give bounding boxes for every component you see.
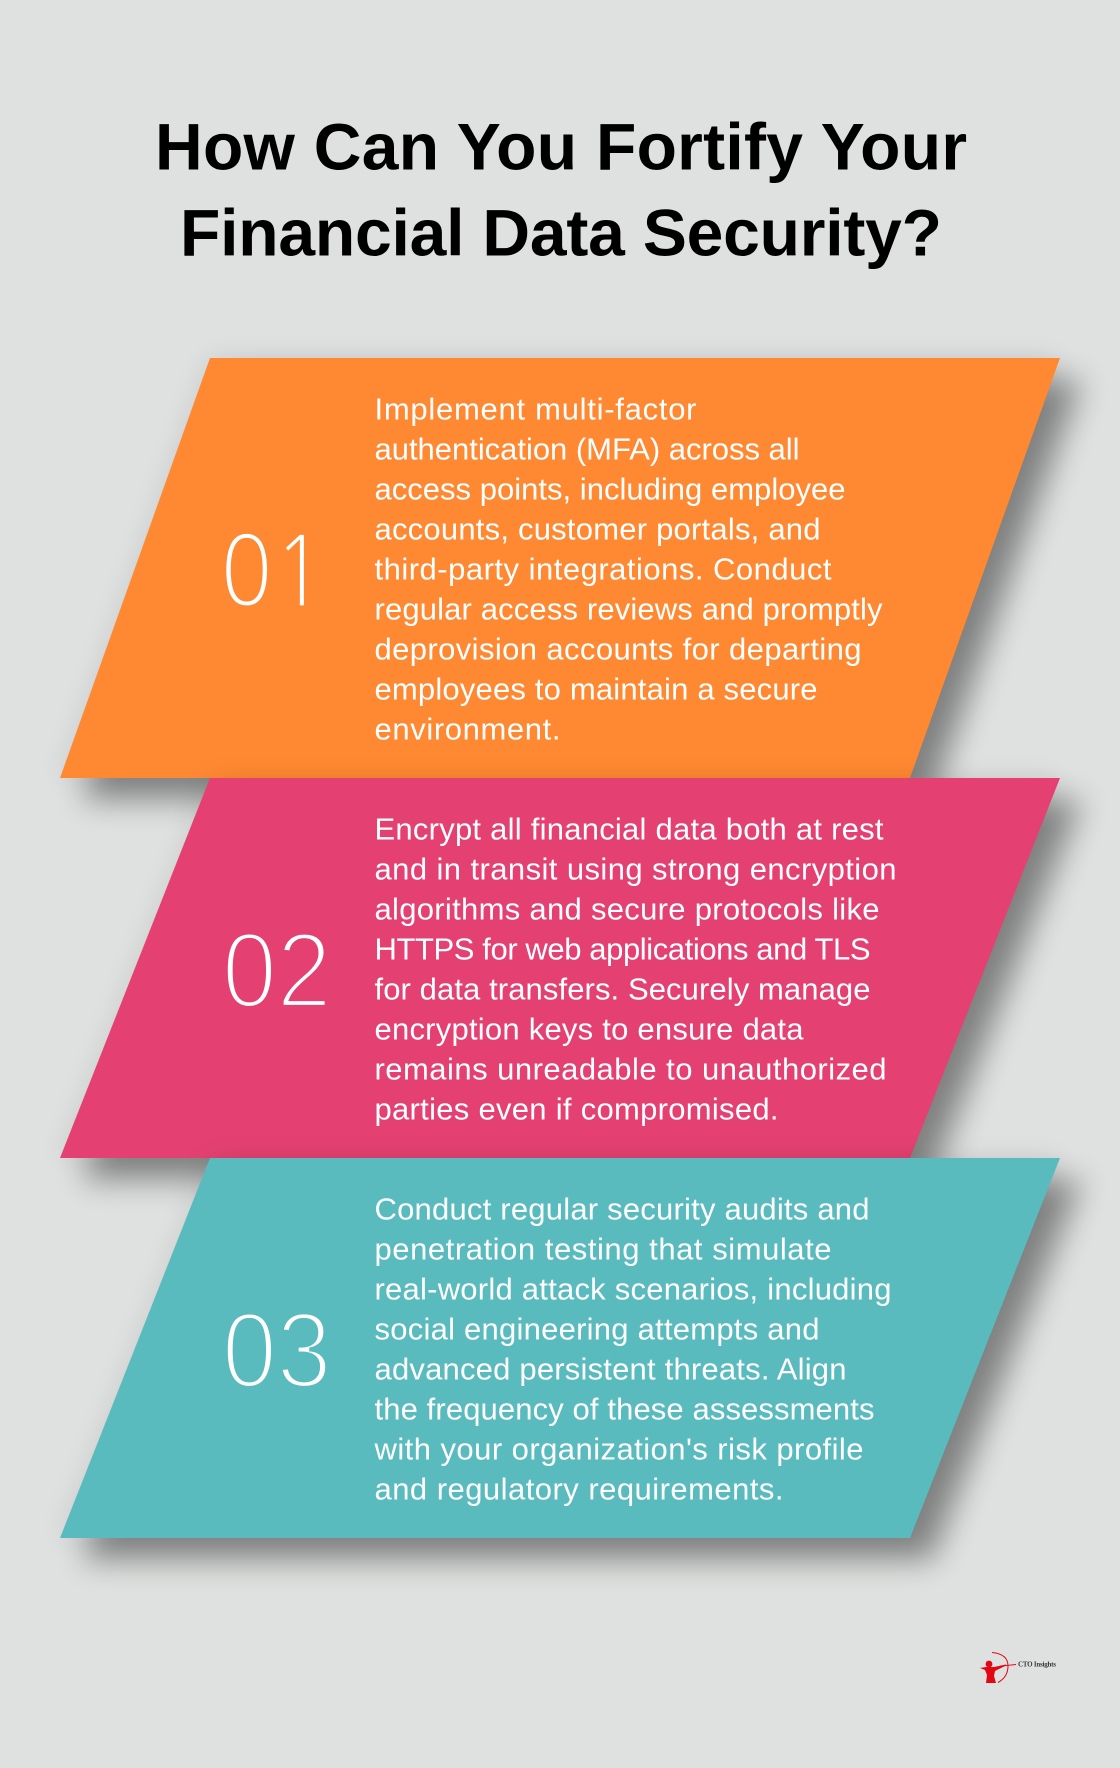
text block: step 01: accounts, customer portals, and [374, 512, 820, 546]
text block: step 03: social engineering attempts and [374, 1312, 820, 1346]
text block: step 02: encryption keys to ensure data [374, 1012, 804, 1046]
text block: step 03: real-world attack scenarios, including [374, 1272, 892, 1306]
text block: step 01: authentication (MFA) across all [374, 432, 800, 466]
text block: step 02: Encrypt all financial data both at rest [374, 812, 884, 846]
text block: step 02 [374, 812, 896, 1126]
panel shape: orange parallelogram [60, 358, 1060, 778]
text block: step 01: deprovision accounts for departing [374, 632, 862, 666]
text block: step 02: for data transfers. Securely manage [374, 972, 870, 1006]
panel shape: pink parallelogram [60, 778, 1060, 1158]
text block: step 01: employees to maintain a secure [374, 672, 818, 706]
text block: step 01: Implement multi-factor [374, 392, 696, 426]
panel: step 02 encryption [60, 778, 1082, 1180]
logo text: CTO Insights [1018, 1660, 1056, 1668]
number 01: 01 [220, 523, 326, 620]
panel: step 03 security audits [60, 1158, 1082, 1560]
text block: step 01: third-party integrations. Conduct [374, 552, 832, 586]
title: How Can You Fortify Your [155, 110, 967, 184]
text block: step 03 [374, 1192, 892, 1506]
text block: step 02: parties even if compromised. [374, 1092, 778, 1126]
text block: step 01: environment. [374, 712, 560, 746]
text block: step 03: the frequency of these assessments [374, 1392, 874, 1426]
title: Financial Data Security? [180, 196, 942, 270]
text block: step 03: and regulatory requirements. [374, 1472, 784, 1506]
text block: step 01: access points, including employee [374, 472, 846, 506]
title [155, 110, 967, 270]
text block: step 02: and in transit using strong encryption [374, 852, 896, 886]
number 02: 02 [222, 910, 332, 1030]
text block: step 03: Conduct regular security audits and [374, 1192, 870, 1226]
text block: step 03: with your organization's risk profile [374, 1432, 864, 1466]
number 03: 03 [222, 1290, 332, 1410]
panel shape: teal parallelogram [60, 1158, 1060, 1538]
text block: step 01 [374, 392, 883, 746]
panel: step 01 multi-factor authentication [60, 358, 1082, 800]
text block: step 02: HTTPS for web applications and TLS [374, 932, 870, 966]
text block: step 03: penetration testing that simulate [374, 1232, 832, 1266]
icon: red archer [980, 1652, 1016, 1683]
text block: step 03: advanced persistent threats. Align [374, 1352, 846, 1386]
text block: step 01: regular access reviews and promptly [374, 592, 883, 626]
text block: step 02: remains unreadable to unauthorized [374, 1052, 886, 1086]
logo: CTO Insights [980, 1652, 1056, 1683]
text block: step 02: algorithms and secure protocols like [374, 892, 880, 926]
